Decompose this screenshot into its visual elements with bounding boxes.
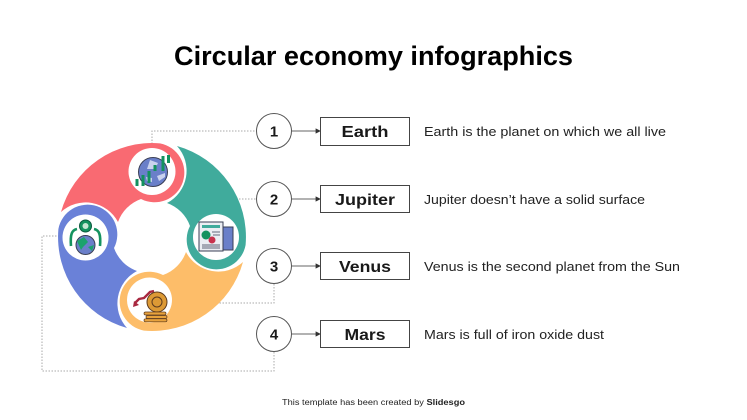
arrow 1 [292, 129, 320, 133]
description 1: Earth is the planet on which we all live [424, 124, 666, 139]
number badge 1: 1 [270, 124, 278, 140]
step 4: Mars [256, 316, 604, 352]
number badge 3 [256, 248, 292, 284]
segment: orange [120, 252, 243, 331]
number badge 3: 3 [270, 258, 278, 276]
step 3: Venus [256, 248, 680, 284]
label box 1: Earth [342, 124, 388, 141]
number badge 2 [256, 182, 292, 216]
arrow 2 [292, 197, 320, 201]
arrow 4 [292, 332, 320, 336]
number badge 1 [256, 114, 292, 148]
number badge 2: 2 [270, 192, 278, 208]
label box 2: Jupiter [335, 192, 395, 209]
label box 1 [320, 118, 410, 146]
dotted connectors [42, 131, 274, 371]
description 3: Venus is the second planet from the Sun [424, 259, 680, 274]
number badge 4 [256, 316, 292, 352]
footer credit: This template has been created by Slidesgo [282, 398, 465, 407]
icon: globe with money cycle [71, 220, 100, 254]
label box 2 [320, 186, 410, 212]
icon: globe with candlesticks [137, 155, 168, 186]
label box 3: Venus [339, 259, 391, 276]
description 2: Jupiter doesn’t have a solid surface [424, 192, 645, 207]
segment: teal [167, 146, 246, 269]
arrow 3 [292, 264, 320, 268]
number badge 4: 4 [270, 326, 279, 344]
segment: red [61, 143, 184, 222]
step 2: Jupiter [256, 182, 645, 216]
segment: blue [58, 205, 137, 328]
label box 3 [320, 252, 410, 280]
circular diagram [58, 143, 246, 331]
icon: newspaper [199, 222, 233, 251]
label box 4 [320, 320, 410, 348]
label box 4: Mars [344, 327, 386, 344]
icon holes [62, 148, 239, 322]
description 4: Mars is full of iron oxide dust [424, 327, 604, 342]
title: Circular economy infographics [174, 41, 573, 71]
icon: falling chart with coins [133, 291, 167, 322]
step 1: Earth [256, 114, 666, 148]
